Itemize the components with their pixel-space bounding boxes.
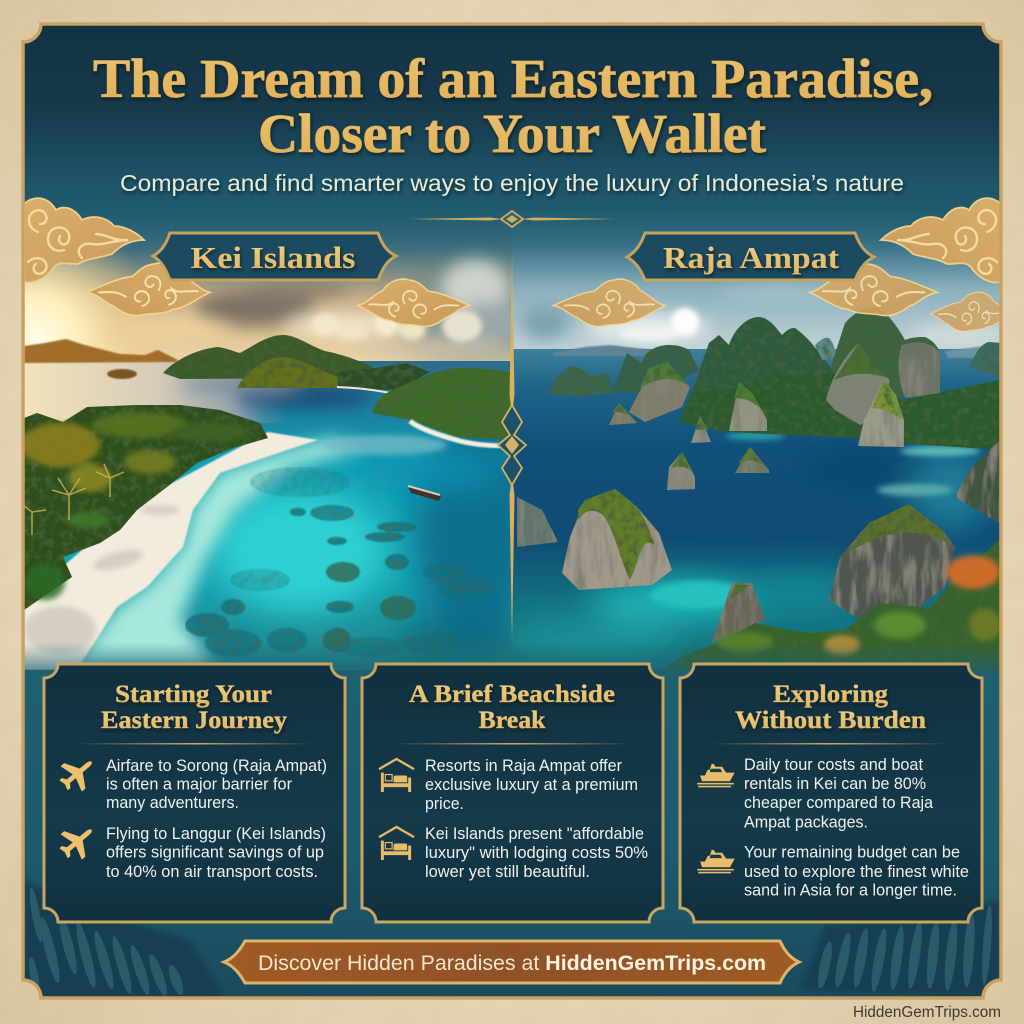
tour cost text: Daily tour costs and boat (744, 756, 923, 774)
Langgur text: offers significant savings of up (106, 844, 324, 862)
sunlit water at left (24, 361, 294, 423)
icon: plane (54, 750, 101, 797)
footer banner: Discover Hidden Paradises at HiddenGemTrips.com (258, 952, 766, 975)
shallows along beach (72, 438, 365, 668)
icon: lodging (379, 759, 414, 792)
plaque: Kei Islands: Kei Islands (190, 240, 356, 275)
plaque: Kei Islands (153, 233, 396, 280)
panel heading (101, 681, 288, 734)
resort text (425, 757, 638, 813)
remaining budget text: Your remaining budget can be (744, 844, 960, 862)
photo: Raja Ampat karst scene (512, 227, 1000, 670)
panel heading: Without Burden (735, 707, 926, 734)
Sorong text: many adventurers. (106, 794, 239, 812)
resort text: Resorts in Raja Ampat offer (425, 757, 623, 775)
panel: Exploring Without Burden (680, 664, 982, 922)
affordable luxury text: lower yet still beautiful. (425, 863, 590, 881)
subtitle: Compare and find smarter ways to enjoy the luxury of Indonesia’s nature (120, 170, 904, 196)
panel heading: Eastern Journey (101, 707, 288, 734)
Langgur text: Flying to Langgur (Kei Islands) (106, 825, 326, 843)
karst mountains (550, 307, 1002, 450)
right green island (372, 368, 512, 440)
icon: plane (54, 818, 101, 865)
resort text: price. (425, 795, 464, 813)
tour cost text: cheaper compared to Raja (744, 794, 933, 812)
panel heading: Starting Your (115, 681, 272, 708)
panel: A Brief Beachside Break (362, 664, 663, 922)
Sorong text (106, 757, 327, 812)
title (93, 48, 933, 164)
panel heading: Break (478, 707, 546, 734)
affordable luxury text (425, 825, 648, 881)
center divider ornament (498, 255, 526, 640)
tour cost text: Ampat packages. (744, 814, 868, 832)
footer banner (224, 941, 799, 983)
title: The Dream of an Eastern Paradise, (93, 48, 933, 109)
boat on water (408, 486, 441, 501)
fade of photos into teal band (24, 644, 1000, 670)
photo: Kei Islands beach scene (24, 228, 512, 670)
tour cost text: rentals in Kei can be 80% (744, 775, 926, 793)
affordable luxury text: luxury" with lodging costs 50% (425, 844, 648, 862)
top ornament (410, 211, 615, 227)
plaque: Raja Ampat: Raja Ampat (663, 240, 840, 275)
panel heading (409, 681, 615, 734)
panel heading (735, 681, 926, 734)
shallow reef patches (650, 432, 980, 609)
bottom foliage (659, 540, 1004, 672)
affordable luxury text: Kei Islands present "affordable (425, 825, 644, 843)
Langgur text (106, 825, 326, 881)
resort text: exclusive luxury at a premium (425, 776, 638, 794)
left jungle (24, 405, 268, 610)
watermark: HiddenGemTrips.com (853, 1004, 1001, 1021)
coral patches (185, 467, 495, 657)
icon: lodging (379, 827, 414, 860)
tour cost text (744, 756, 933, 832)
distant island (24, 339, 178, 363)
panel heading: Exploring (773, 681, 889, 708)
decorative clouds (24, 198, 1012, 332)
Sorong text: Airfare to Sorong (Raja Ampat) (106, 757, 327, 775)
panel: Starting Your Eastern Journey (44, 664, 345, 922)
center green hills (163, 335, 373, 379)
white sand beach (24, 432, 318, 670)
title: Closer to Your Wallet (258, 103, 767, 164)
remaining budget text: sand in Asia for a longer time. (744, 882, 957, 900)
icon: boat (697, 850, 735, 873)
rock texture footer (24, 880, 1000, 998)
panel heading: A Brief Beachside (409, 681, 615, 708)
Langgur text: to 40% on air transport costs. (106, 863, 318, 881)
remaining budget text: used to explore the finest white (744, 863, 969, 881)
remaining budget text (744, 844, 969, 900)
icon: boat (697, 764, 735, 787)
plaque: Raja Ampat (627, 233, 874, 280)
sea rocks (517, 416, 1002, 643)
Sorong text: is often a major barrier for (106, 776, 293, 794)
